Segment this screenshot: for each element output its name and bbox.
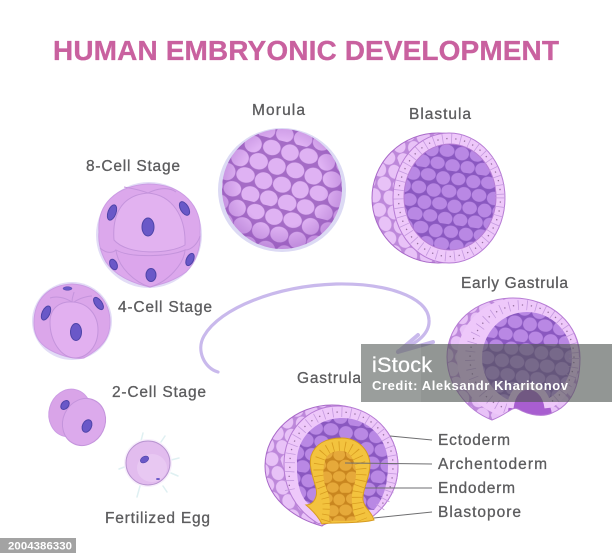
label: Blastopore: Blastopore bbox=[438, 504, 521, 521]
label: Early Gastrula: Early Gastrula bbox=[461, 275, 568, 292]
label: 2-Cell Stage: 2-Cell Stage bbox=[112, 384, 206, 401]
label: Archentoderm: Archentoderm bbox=[438, 456, 547, 473]
illustration: fertilized egg bbox=[119, 433, 179, 497]
illustration: 2-cell stage bbox=[44, 384, 113, 453]
illustration: early gastrula bbox=[446, 298, 580, 420]
illustration: gastrula bbox=[265, 405, 398, 526]
label: Ectoderm: Ectoderm bbox=[438, 432, 510, 449]
archenteron cavity bbox=[323, 451, 356, 521]
label: Endoderm: Endoderm bbox=[438, 480, 515, 497]
label: Morula: Morula bbox=[252, 102, 305, 119]
watermark credit: Credit: Aleksandr Kharitonov bbox=[372, 378, 569, 393]
label: 8-Cell Stage: 8-Cell Stage bbox=[86, 158, 180, 175]
illustration: blastula bbox=[372, 133, 505, 263]
image id tag bbox=[0, 538, 76, 553]
image id tag: 2004386330 bbox=[8, 540, 72, 552]
illustration: 8-cell stage bbox=[96, 182, 202, 288]
label: Gastrula: Gastrula bbox=[297, 370, 361, 387]
watermark band bbox=[361, 344, 612, 402]
label: Fertilized Egg: Fertilized Egg bbox=[105, 510, 210, 527]
leader lines bbox=[345, 436, 432, 518]
label: Blastula: Blastula bbox=[409, 106, 471, 123]
watermark: iStock: iStock bbox=[372, 353, 432, 377]
arrow: gastrula to cleavage cycle bbox=[201, 284, 433, 372]
illustration: 4-cell stage bbox=[32, 282, 112, 360]
title: HUMAN EMBRYONIC DEVELOPMENT bbox=[53, 35, 559, 66]
illustration: morula bbox=[218, 128, 346, 252]
label: 4-Cell Stage: 4-Cell Stage bbox=[118, 299, 212, 316]
archenteron wall cells bbox=[319, 447, 362, 521]
yellow: archenteron wall bbox=[306, 438, 374, 524]
